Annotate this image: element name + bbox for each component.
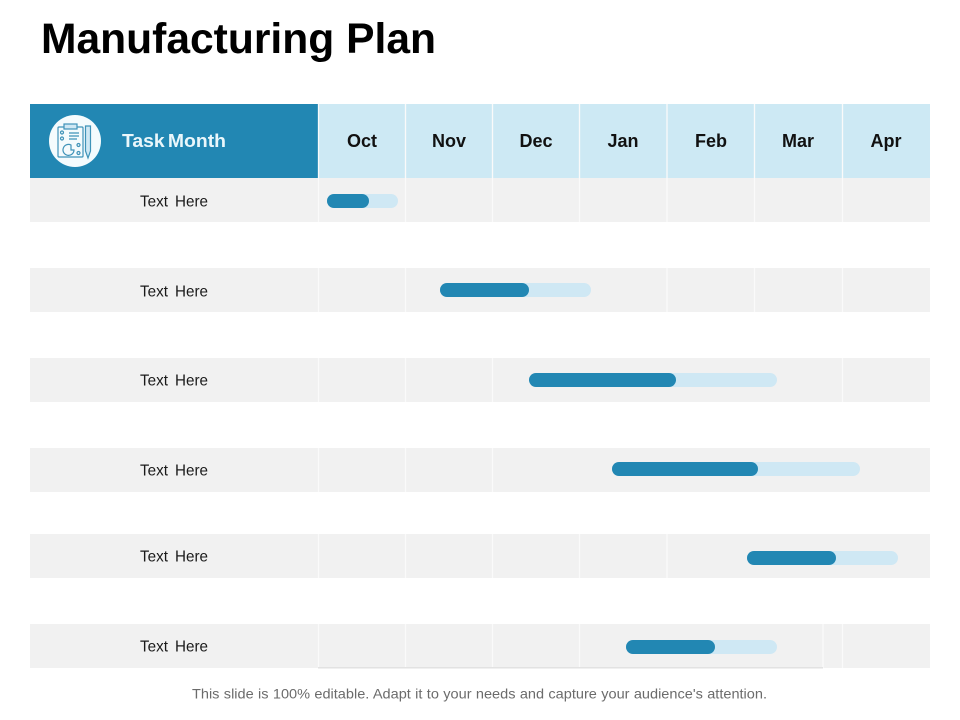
month cells: Mar [782, 131, 814, 151]
row 2 [30, 268, 930, 312]
bar: row 1 [327, 194, 398, 208]
bar: row 2 [440, 283, 591, 297]
month cells: Apr [870, 131, 902, 151]
icon: clipboard and pen [49, 115, 101, 167]
header cell: task month [30, 104, 318, 178]
title: Manufacturing Plan [41, 15, 436, 63]
month cells: Dec [519, 131, 553, 151]
row 1: Text Here [140, 194, 208, 210]
bar: row 5 [747, 551, 898, 565]
footer note: This slide is 100% editable. Adapt it to your needs and capture your audience's attention. [192, 686, 767, 702]
row 6: Text Here [140, 638, 208, 656]
table header [30, 104, 930, 178]
bar: row 4 [612, 462, 860, 476]
month cells: Nov [432, 131, 466, 151]
row 4: Text Here [140, 462, 208, 480]
row 3 [30, 358, 930, 402]
month cells: Oct [347, 131, 377, 151]
row 4 [30, 448, 930, 492]
row 6 [30, 624, 930, 668]
row 2: Text Here [140, 284, 208, 300]
row 5: Text Here [140, 548, 208, 566]
row 3: Text Here [140, 372, 208, 390]
row 5 [30, 534, 930, 578]
header label: task month: Task Month [122, 131, 226, 151]
bar: row 3 [529, 373, 777, 387]
month cells: Feb [695, 131, 727, 151]
month cells: Jan [607, 131, 639, 151]
bar: row 6 [626, 640, 777, 654]
row 1 [30, 178, 930, 222]
month cells [318, 104, 930, 178]
